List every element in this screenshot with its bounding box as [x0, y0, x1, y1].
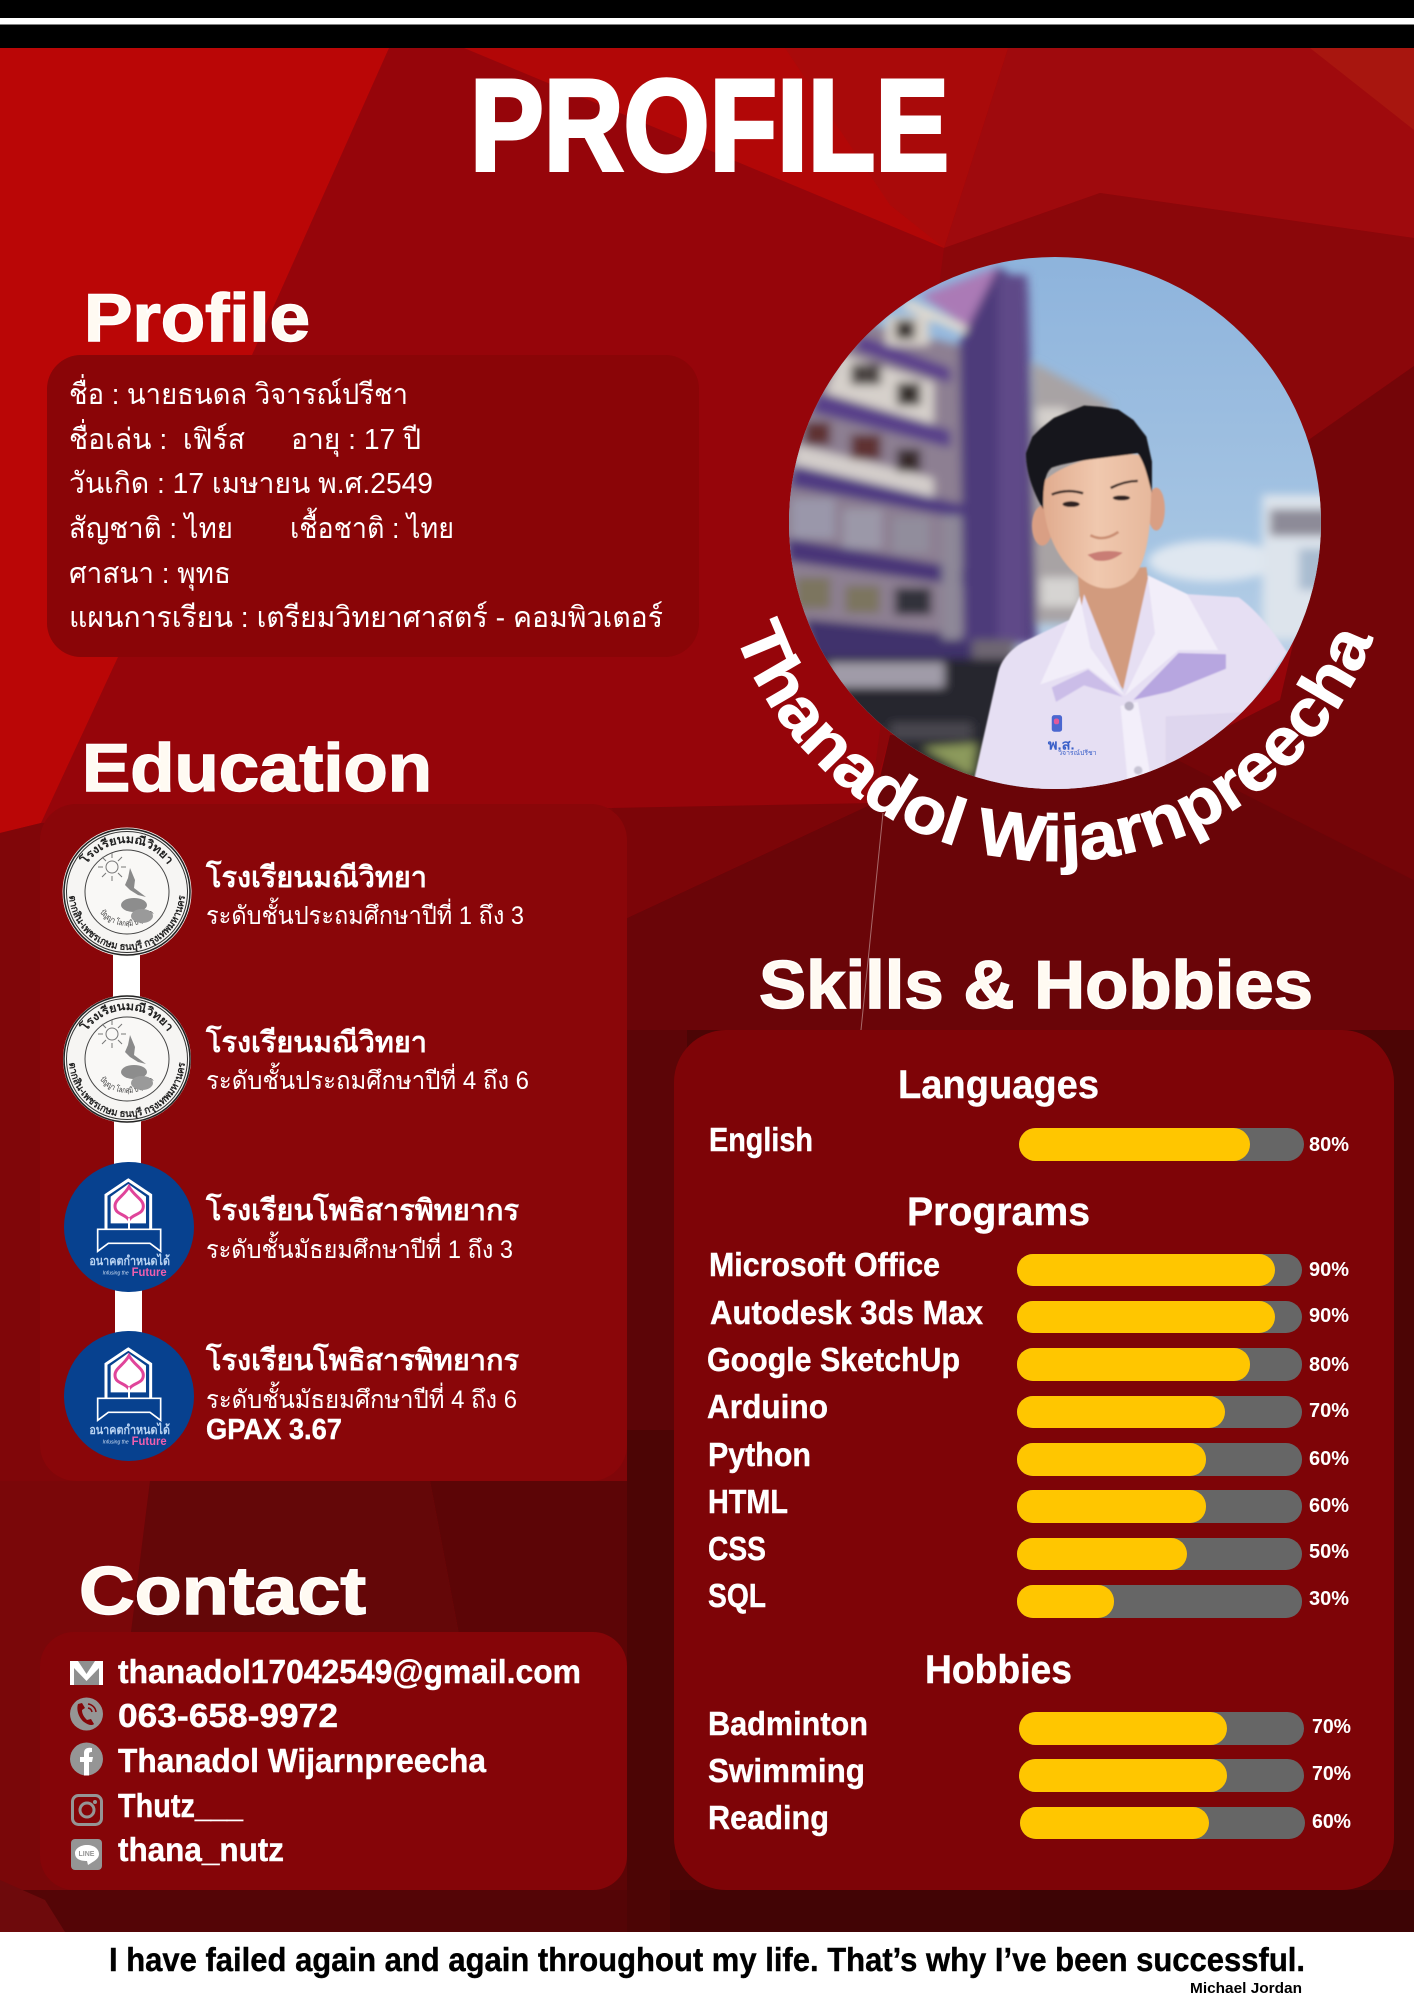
subheading: hobbies: Hobbies [925, 1648, 1072, 1692]
title: PROFILE [470, 52, 949, 198]
icon: phone [70, 1698, 103, 1730]
icon: line [71, 1839, 102, 1870]
icon: instagram [72, 1796, 102, 1824]
icon: Mani Witthaya school seal 2: ตากสิน-เพชรเกษม ธนบุรี กรุงเทพมหานคร [68, 1062, 185, 1119]
skill: SQL 30%: 30% [1309, 1588, 1349, 1610]
quote: I have failed again and again throughout my life. That’s why I’ve been successful. [109, 1941, 1305, 1978]
timeline connector 2 [114, 1118, 141, 1168]
icon: Phothisarn Pittayakorn school logo 1: Infusing the [103, 1271, 129, 1277]
icon: Phothisarn Pittayakorn school logo 2: Future [132, 1434, 167, 1448]
heading: education: Education [82, 730, 432, 806]
skill: English 80% [709, 1121, 1349, 1161]
skill: Arduino 70%: 70% [1309, 1400, 1349, 1422]
text: age: อายุ : 17 ปี [291, 424, 421, 457]
school entry 2: โรงเรียนมณีวิทยา [205, 1024, 427, 1059]
skill: HTML 60% [708, 1483, 1349, 1523]
school entry 1 [205, 859, 524, 930]
text: nickname: ชื่อเล่น : เฟิร์ส [69, 419, 245, 456]
text: ethnicity: เชื้อชาติ : ไทย [290, 507, 454, 545]
skill: SQL 30%: SQL [708, 1577, 766, 1614]
panel: skills and hobbies [674, 1030, 1394, 1890]
panel: profile details [47, 355, 699, 657]
hobby: Badminton 70%: 70% [1312, 1716, 1351, 1738]
school entry 2 [205, 1024, 529, 1095]
skill: Microsoft Office 90% [709, 1246, 1349, 1286]
text: phone number: 063-658-9972 [118, 1697, 338, 1734]
skill: English 80%: English [709, 1121, 813, 1158]
photo: portrait in circle: วิจารณ์ปรีชา [1058, 749, 1097, 757]
skill: English 80%: 80% [1309, 1134, 1349, 1156]
skill: Microsoft Office 90%: Microsoft Office [709, 1246, 940, 1283]
skill: Microsoft Office 90%: 90% [1309, 1259, 1349, 1281]
icon: Mani Witthaya school seal 1: ปัญญา โลกสฺมิ ปชฺโชโต [100, 909, 154, 928]
school entry 1: ระดับชั้นประถมศึกษาปีที่ 1 ถึง 3 [206, 897, 524, 930]
hobby: Reading 60%: Reading [708, 1799, 829, 1836]
timeline connector 3 [115, 1285, 142, 1335]
hobby: Badminton 70% [708, 1705, 1351, 1745]
icon: Phothisarn Pittayakorn school logo 1 [64, 1162, 194, 1292]
hobby: Reading 60% [708, 1799, 1351, 1839]
text: name: ชื่อ : นายธนดล วิจารณ์ปรีชา [69, 374, 408, 411]
heading: profile: Profile [84, 280, 310, 356]
icon: Phothisarn Pittayakorn school logo 2 [64, 1331, 194, 1461]
skill: Google SketchUp 80%: Google SketchUp [707, 1341, 960, 1378]
text: instagram handle: Thutz___ [118, 1787, 244, 1824]
icon: Mani Witthaya school seal 2: ปัญญา โลกสฺมิ ปชฺโชโต [100, 1076, 154, 1094]
panel: education [40, 804, 627, 1481]
icon: Mani Witthaya school seal 1: โรงเรียนมณีวิทยา [78, 836, 172, 864]
icon: mail [70, 1661, 103, 1685]
skill: Autodesk 3ds Max 90%: Autodesk 3ds Max [710, 1294, 984, 1331]
school entry 4: ระดับชั้นมัธยมศึกษาปีที่ 4 ถึง 6 [206, 1381, 517, 1414]
hobby: Swimming 70% [708, 1752, 1351, 1792]
photo: portrait in circle [766, 250, 1332, 799]
school entry 4 [205, 1342, 519, 1446]
icon: Mani Witthaya school seal 2 [63, 995, 191, 1123]
text: study plan: แผนการเรียน : เตรียมวิทยาศาสตร์ - คอมพิวเตอร์ [69, 601, 663, 634]
skill: Python 60%: 60% [1309, 1448, 1349, 1470]
skill: SQL 30% [708, 1577, 1349, 1618]
hobby: Reading 60%: 60% [1312, 1811, 1351, 1833]
subheading: programs: Programs [907, 1190, 1090, 1234]
icon: Mani Witthaya school seal 1: ตากสิน-เพชรเกษม ธนบุรี กรุงเทพมหานคร [68, 895, 185, 952]
icon: Mani Witthaya school seal 2: โรงเรียนมณีวิทยา [78, 1002, 172, 1032]
text: email: thanadol17042549@gmail.com [118, 1653, 581, 1690]
photo: portrait in circle: พ.ส. [1048, 738, 1075, 754]
hobby: Swimming 70%: 70% [1312, 1763, 1351, 1785]
header bar [0, 0, 1414, 48]
skill: Autodesk 3ds Max 90%: 90% [1309, 1305, 1349, 1327]
text: birth date: วันเกิด : 17 เมษายน พ.ศ.2549 [69, 468, 433, 500]
icon: Phothisarn Pittayakorn school logo 1: Future [132, 1265, 167, 1279]
school entry 4: GPAX 3.67 [206, 1414, 342, 1446]
hobby: Swimming 70%: Swimming [708, 1752, 865, 1789]
skill: Python 60%: Python [708, 1436, 811, 1473]
skill: CSS 50%: 50% [1309, 1541, 1349, 1563]
text: nationality: สัญชาติ : ไทย [69, 511, 233, 545]
quote attribution: Michael Jordan [1190, 1980, 1302, 1997]
icon: Phothisarn Pittayakorn school logo 2: อนาคตกำหนดได้ [89, 1422, 170, 1437]
curved name: Thanadol Wijarnpreecha [740, 616, 1374, 875]
text: religion: ศาสนา : พุทธ [69, 558, 231, 591]
skill: HTML 60%: HTML [708, 1483, 788, 1520]
skill: CSS 50%: CSS [708, 1530, 766, 1567]
footer: quote band [0, 1932, 1414, 2000]
school entry 1: โรงเรียนมณีวิทยา [205, 859, 427, 894]
school entry 4: โรงเรียนโพธิสารพิทยากร [205, 1342, 519, 1377]
school entry 3: โรงเรียนโพธิสารพิทยากร [205, 1192, 519, 1227]
school entry 2: ระดับชั้นประถมศึกษาปีที่ 4 ถึง 6 [206, 1062, 529, 1095]
icon: line: LINE [78, 1851, 95, 1858]
skill: CSS 50% [708, 1530, 1349, 1570]
icon: Phothisarn Pittayakorn school logo 2: Infusing the [103, 1440, 129, 1446]
text: facebook name: Thanadol Wijarnpreecha [118, 1742, 487, 1779]
skill: Autodesk 3ds Max 90% [710, 1294, 1349, 1333]
icon: facebook [70, 1742, 103, 1776]
heading: contact: Contact [79, 1553, 366, 1629]
skill: Google SketchUp 80%: 80% [1309, 1354, 1349, 1376]
icon: Mani Witthaya school seal 1 [62, 828, 192, 956]
subheading: languages: Languages [898, 1063, 1099, 1107]
skill: Arduino 70%: Arduino [707, 1388, 828, 1425]
text: line id: thana_nutz [118, 1831, 284, 1868]
timeline connector 1 [113, 950, 140, 1000]
school entry 3: ระดับชั้นมัธยมศึกษาปีที่ 1 ถึง 3 [206, 1231, 513, 1264]
skill: Arduino 70% [707, 1388, 1349, 1428]
heading: skills and hobbies: Skills & Hobbies [759, 947, 1313, 1023]
skill: Python 60% [708, 1436, 1349, 1476]
school entry 3 [205, 1192, 519, 1264]
skill: Google SketchUp 80% [707, 1341, 1349, 1381]
skill: HTML 60%: 60% [1309, 1495, 1349, 1517]
hobby: Badminton 70%: Badminton [708, 1705, 868, 1742]
panel: contact [40, 1632, 627, 1890]
icon: Phothisarn Pittayakorn school logo 1: อนาคตกำหนดได้ [89, 1253, 170, 1268]
